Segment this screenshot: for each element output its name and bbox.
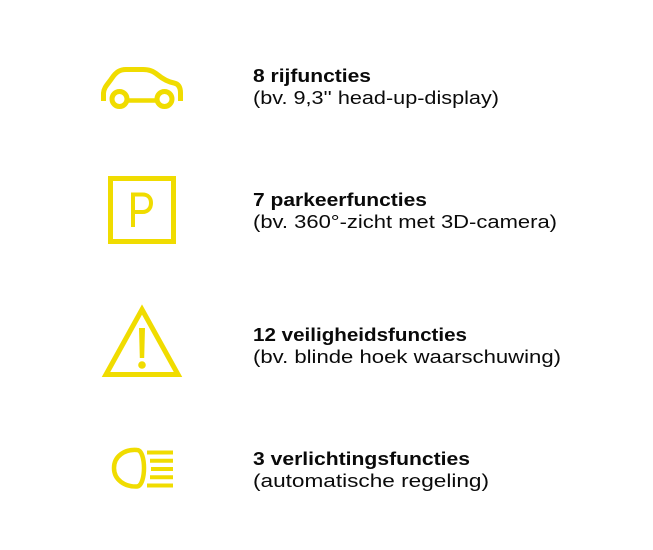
text: safety functions: [253, 324, 561, 367]
text: driving functions: (bv. 9,3'' head-up-display): [253, 87, 499, 108]
text: lighting functions: 3 verlichtingsfuncties: [253, 448, 470, 469]
text: parking functions: 7 parkeerfuncties: [253, 189, 427, 210]
icon: car: [104, 70, 180, 106]
text: driving functions: [253, 65, 499, 108]
icon: headlight: [114, 450, 173, 487]
text: lighting functions: (automatische regeling): [253, 470, 489, 491]
text: safety functions: (bv. blinde hoek waarschuwing): [253, 346, 561, 367]
text: driving functions: 8 rijfuncties: [253, 65, 371, 86]
icon: warning triangle: [106, 310, 178, 374]
text: parking functions: (bv. 360°-zicht met 3D-camera): [253, 211, 557, 232]
text: parking functions: [253, 189, 557, 232]
text: safety functions: 12 veiligheidsfuncties: [253, 324, 467, 345]
text: lighting functions: [253, 448, 489, 491]
icon: parking square: [110, 178, 174, 242]
